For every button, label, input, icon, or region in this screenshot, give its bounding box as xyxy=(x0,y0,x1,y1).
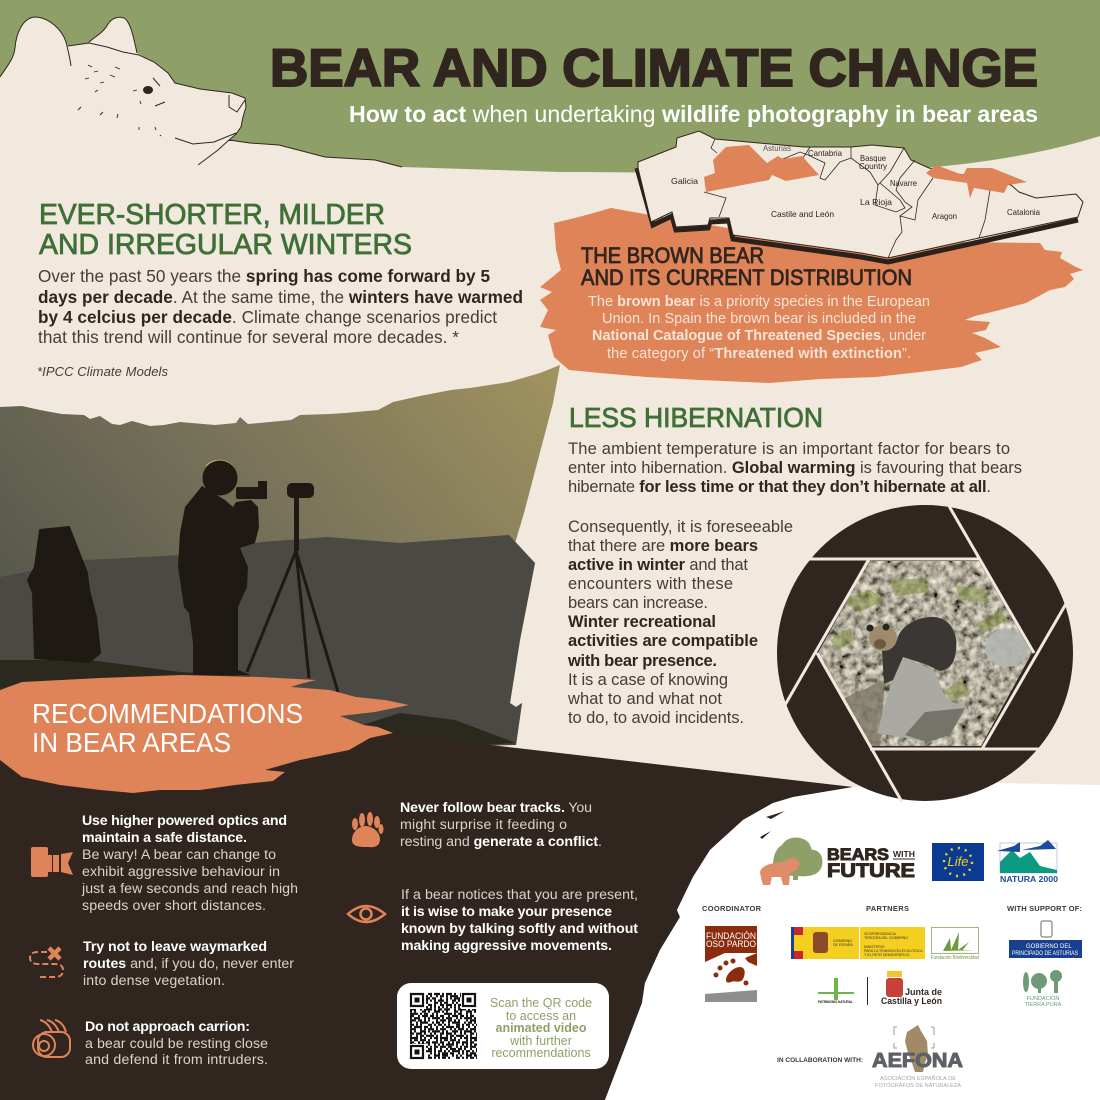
recommendation: waymarked routes xyxy=(30,939,294,989)
logo: Fundación Oso Pardo: OSO PARDO xyxy=(706,939,756,949)
brown bear heading: THE BROWN BEAR xyxy=(581,243,764,268)
ground xyxy=(0,660,516,760)
map labels: Navarre xyxy=(890,178,917,188)
hibernation detail text: what to and what not xyxy=(567,690,722,708)
bear head illustration xyxy=(0,17,402,190)
logo: Fundación Biodiversidad xyxy=(931,928,979,961)
logo: Spanish government: TERCERA DEL GOBIERNO xyxy=(864,936,908,940)
winters text xyxy=(38,266,523,347)
text: optics: exhibit aggressive behaviour in xyxy=(82,864,280,880)
map labels xyxy=(671,143,1040,221)
aperture blade lines xyxy=(785,506,1067,802)
logo: Fundación Biodiversidad: Fundación Biodiversidad xyxy=(931,955,979,961)
text: tracks: resting and generate a conflict. xyxy=(400,834,602,850)
text: routes: routes and, if you do, never enter xyxy=(83,956,294,972)
logo: Spanish government: DE ESPAÑA xyxy=(833,942,853,947)
QR caption: recommendations xyxy=(491,1046,591,1060)
brown bear text: National Catalogue of Threatened Species, under xyxy=(592,328,926,344)
QR code xyxy=(409,992,478,1061)
icon: camera xyxy=(31,847,73,877)
logo: Fundación Oso Pardo xyxy=(705,926,757,1002)
hibernation detail text: to do, to avoid incidents. xyxy=(568,709,744,727)
hibernation detail text: that there are more bears xyxy=(568,537,758,555)
QR caption xyxy=(490,996,592,1060)
logo: Spanish government: GOBIERNO xyxy=(833,939,852,943)
logo labels xyxy=(702,904,1082,913)
logo: Bears with Future xyxy=(760,837,915,885)
hibernation detail text: Winter recreational xyxy=(568,613,716,631)
silhouette: photographer xyxy=(178,460,267,675)
text: presence: If a bear notices that you are present, xyxy=(401,887,638,903)
logos block xyxy=(702,837,1082,1089)
logo: Principado de Asturias xyxy=(1009,921,1082,958)
winters heading xyxy=(39,199,412,261)
recommendation: carrion xyxy=(33,1019,268,1068)
hibernation heading: LESS HIBERNATION xyxy=(569,402,823,433)
text: presence: making aggressive movements. xyxy=(401,938,612,954)
panel: dark recommendations background xyxy=(0,728,853,1100)
icon: eye xyxy=(348,906,385,922)
distant hills xyxy=(0,535,535,745)
text: routes: Try not to leave waymarked xyxy=(83,939,267,955)
logo: Junta de Castilla y León xyxy=(867,971,942,1006)
logo: Natura 2000: NATURA 2000 xyxy=(1000,875,1059,884)
logo: Junta de Castilla y León: Castilla y León xyxy=(881,996,942,1006)
QR caption: with further xyxy=(509,1034,572,1048)
text: carrion: and defend it from intruders. xyxy=(85,1052,268,1068)
logo: Spanish government: PARA LA TRANSICIÓN ECOLÓGICA xyxy=(864,948,923,953)
text: carrion: a bear could be resting close xyxy=(85,1036,268,1052)
text: tracks: might surprise it feeding o xyxy=(400,817,567,833)
text: optics: just a few seconds and reach high xyxy=(81,881,298,897)
logo: Principado de Asturias: GOBIERNO DEL xyxy=(1026,944,1072,950)
hibernation detail text: bears can increase. xyxy=(568,594,708,612)
map labels: Country xyxy=(859,161,888,171)
logo: Spanish government: VICEPRESIDENCIA xyxy=(864,932,897,936)
recommendation: optics xyxy=(31,813,298,914)
winters heading: EVER-SHORTER, MILDER xyxy=(39,199,385,231)
brown bear text: The brown bear is a priority species in the European xyxy=(588,294,930,310)
hibernation detail text: active in winter and that xyxy=(568,556,748,574)
orange brush: brown bear distribution xyxy=(540,131,1083,383)
hibernation detail text: encounters with these xyxy=(568,575,733,593)
orange recommendations banner xyxy=(0,675,409,793)
logo: AEFONA xyxy=(872,1025,963,1089)
QR card xyxy=(397,983,609,1069)
subtitle: How to act when undertaking wildlife photography in bear areas xyxy=(349,101,1038,127)
text: routes: into dense vegetation. xyxy=(83,973,225,989)
logo: Fundación Tierra Pura: TIERRA PURA xyxy=(1025,1002,1062,1008)
logo: Fundación Oso Pardo: FUNDACIÓN xyxy=(706,931,756,941)
banner heading: RECOMMENDATIONS xyxy=(32,698,303,729)
logo: Bears with Future: WITH xyxy=(893,850,915,859)
hibernation detail text xyxy=(567,518,793,727)
bear photo xyxy=(815,558,1035,748)
winters heading: AND IRREGULAR WINTERS xyxy=(39,229,412,261)
silhouette: covered bag xyxy=(28,527,100,662)
logo: Junta de Castilla y León: Junta de xyxy=(905,987,942,997)
icon: route with cross xyxy=(30,948,63,977)
text: presence xyxy=(401,887,638,954)
QR caption: to access an xyxy=(506,1009,576,1023)
winters text: that this trend will continue for several more decades. * xyxy=(38,327,459,347)
logo: Spanish government: MINISTERIO xyxy=(864,945,885,949)
hibernation detail text: Consequently, it is foreseeable xyxy=(568,518,793,536)
hibernation intro text: enter into hibernation. Global warming is favouring that bears xyxy=(568,459,1022,477)
logo: Spanish government xyxy=(791,927,925,959)
winters text: by 4 celcius per decade. Climate change scenarios predict xyxy=(38,307,497,327)
hibernation detail text: It is a case of knowing xyxy=(568,671,728,689)
logo: Fundación Tierra Pura xyxy=(1023,970,1062,1008)
logo: Fundación Tierra Pura: FUNDACIÓN xyxy=(1027,995,1059,1002)
map labels: La Rioja xyxy=(860,197,892,207)
logo: biosphere reserve cross: PATRIMONIO NATURAL xyxy=(818,1000,854,1004)
logo: Principado de Asturias: PRINCIPADO DE ASTURIAS xyxy=(1012,951,1078,957)
header band xyxy=(0,0,1100,173)
winters text: Over the past 50 years the spring has come forward by 5 xyxy=(38,266,490,286)
text: optics: Be wary! A bear can change to xyxy=(82,847,276,863)
panel: less hibernation xyxy=(567,402,1073,802)
logo labels: PARTNERS xyxy=(866,904,909,913)
title: BEAR AND CLIMATE CHANGE xyxy=(270,39,1038,98)
brown bear heading xyxy=(581,243,912,290)
logo: Bears with Future: BEARS xyxy=(827,845,889,864)
map labels: Cantabria xyxy=(808,148,842,158)
logo labels: COORDINATOR xyxy=(702,904,762,913)
logo labels: WITH SUPPORT OF: xyxy=(1007,904,1082,913)
logo: biosphere reserve cross xyxy=(818,978,854,1004)
logo: AEFONA: FOTÓGRAFOS DE NATURALEZA xyxy=(875,1082,961,1089)
logo: AEFONA: AEFONA xyxy=(872,1050,963,1072)
text: presence: it is wise to make your presence xyxy=(401,904,612,920)
text: presence: known by talking softly and without xyxy=(401,921,638,937)
logo: EU Life: Life xyxy=(948,854,968,869)
logo: Natura 2000 xyxy=(997,840,1059,884)
recommendation: make presence known xyxy=(348,887,638,954)
text: carrion xyxy=(85,1019,268,1068)
panel: winters xyxy=(37,199,523,379)
hibernation intro text xyxy=(568,440,1022,496)
aperture with bear photo xyxy=(777,505,1073,802)
logo: Spanish government: Y EL RETO DEMOGRÁFICO xyxy=(864,953,910,957)
brown bear text: Union. In Spain the brown bear is included in the xyxy=(602,311,916,327)
text: optics: speeds over short distances. xyxy=(82,898,266,914)
hibernation intro text: hibernate for less time or that they don’t hibernate at all. xyxy=(568,478,991,496)
brown bear heading: AND ITS CURRENT DISTRIBUTION xyxy=(581,265,912,290)
text: optics: Use higher powered optics and xyxy=(82,813,287,829)
icon: carcass xyxy=(33,1020,70,1057)
hibernation intro text: The ambient temperature is an important factor for bears to xyxy=(568,440,1010,458)
banner heading xyxy=(32,698,303,758)
map labels: Asturias xyxy=(763,143,791,153)
QR caption: animated video xyxy=(496,1021,587,1035)
brown bear text: the category of “Threatened with extinction”. xyxy=(607,346,911,362)
map labels: Castile and León xyxy=(771,209,834,219)
map labels: Basque xyxy=(860,153,886,163)
collaboration label: IN COLLABORATION WITH: xyxy=(777,1057,863,1064)
text: tracks xyxy=(400,800,602,850)
text: carrion: Do not approach carrion: xyxy=(85,1019,250,1035)
winters text: days per decade. At the same time, the winters have warmed xyxy=(38,287,523,307)
map of northern Spain xyxy=(637,131,1083,262)
logo: Bears with Future: FUTURE xyxy=(827,861,915,882)
banner heading: IN BEAR AREAS xyxy=(32,727,231,758)
panel: white logos background xyxy=(605,783,1100,1100)
text: tracks: Never follow bear tracks. You xyxy=(400,800,592,816)
map labels: Catalonia xyxy=(1007,207,1040,217)
logo: EU Life xyxy=(932,843,984,881)
hibernation detail text: with bear presence. xyxy=(567,652,717,670)
silhouette: tripod and camera xyxy=(247,483,338,692)
hibernation detail text: activities are compatible xyxy=(568,632,758,650)
map labels: Galicia xyxy=(671,176,698,186)
icon: paw print xyxy=(352,812,384,847)
brown bear text xyxy=(588,294,930,362)
source note: *IPCC Climate Models xyxy=(37,364,168,379)
text: optics xyxy=(81,813,298,914)
photo: photographer at sunset xyxy=(0,365,560,760)
QR caption: Scan the QR code xyxy=(490,996,592,1010)
logo: AEFONA: ASOCIACIÓN ESPAÑOLA DE xyxy=(880,1075,956,1082)
text: optics: maintain a safe distance. xyxy=(82,830,247,846)
text: routes xyxy=(83,939,294,989)
recommendation: bear tracks xyxy=(352,800,602,850)
map labels: Aragon xyxy=(932,211,957,221)
